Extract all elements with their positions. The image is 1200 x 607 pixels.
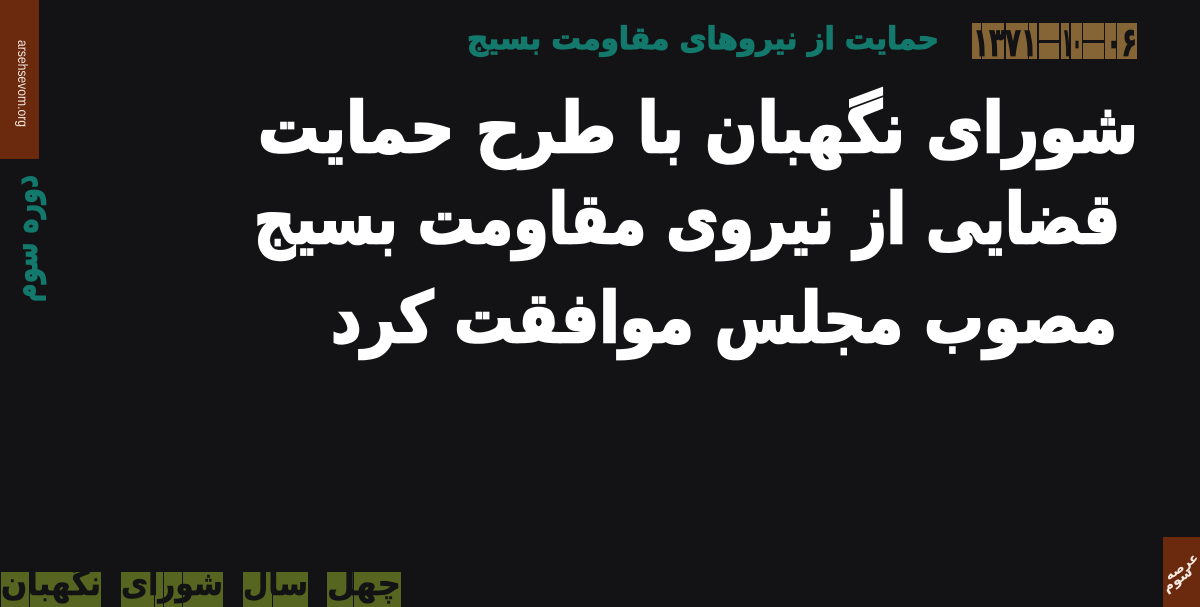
date year: ۱۳۷۱ xyxy=(973,20,1037,66)
date separators xyxy=(1039,40,1104,43)
logo tab xyxy=(1160,537,1200,607)
footer word 4: نگهبان xyxy=(1,564,101,604)
date badge: ۱۰ xyxy=(1062,20,1082,66)
footer word 3: شورای xyxy=(121,564,223,604)
panel: website tab xyxy=(0,0,39,159)
date badge xyxy=(972,20,1137,66)
website address: arsehsevom.org xyxy=(15,40,31,127)
headline xyxy=(254,87,1138,359)
logo mark lower: سوم xyxy=(1160,564,1196,596)
period label: دوره سوم xyxy=(5,175,46,302)
footer word 2: سال xyxy=(243,564,308,604)
footer word 1: چهل xyxy=(327,564,401,604)
date day: ۰۶ xyxy=(1106,20,1137,66)
footer title xyxy=(1,564,401,607)
subtitle: حمایت از نیروهای مقاومت بسیج xyxy=(467,21,939,57)
